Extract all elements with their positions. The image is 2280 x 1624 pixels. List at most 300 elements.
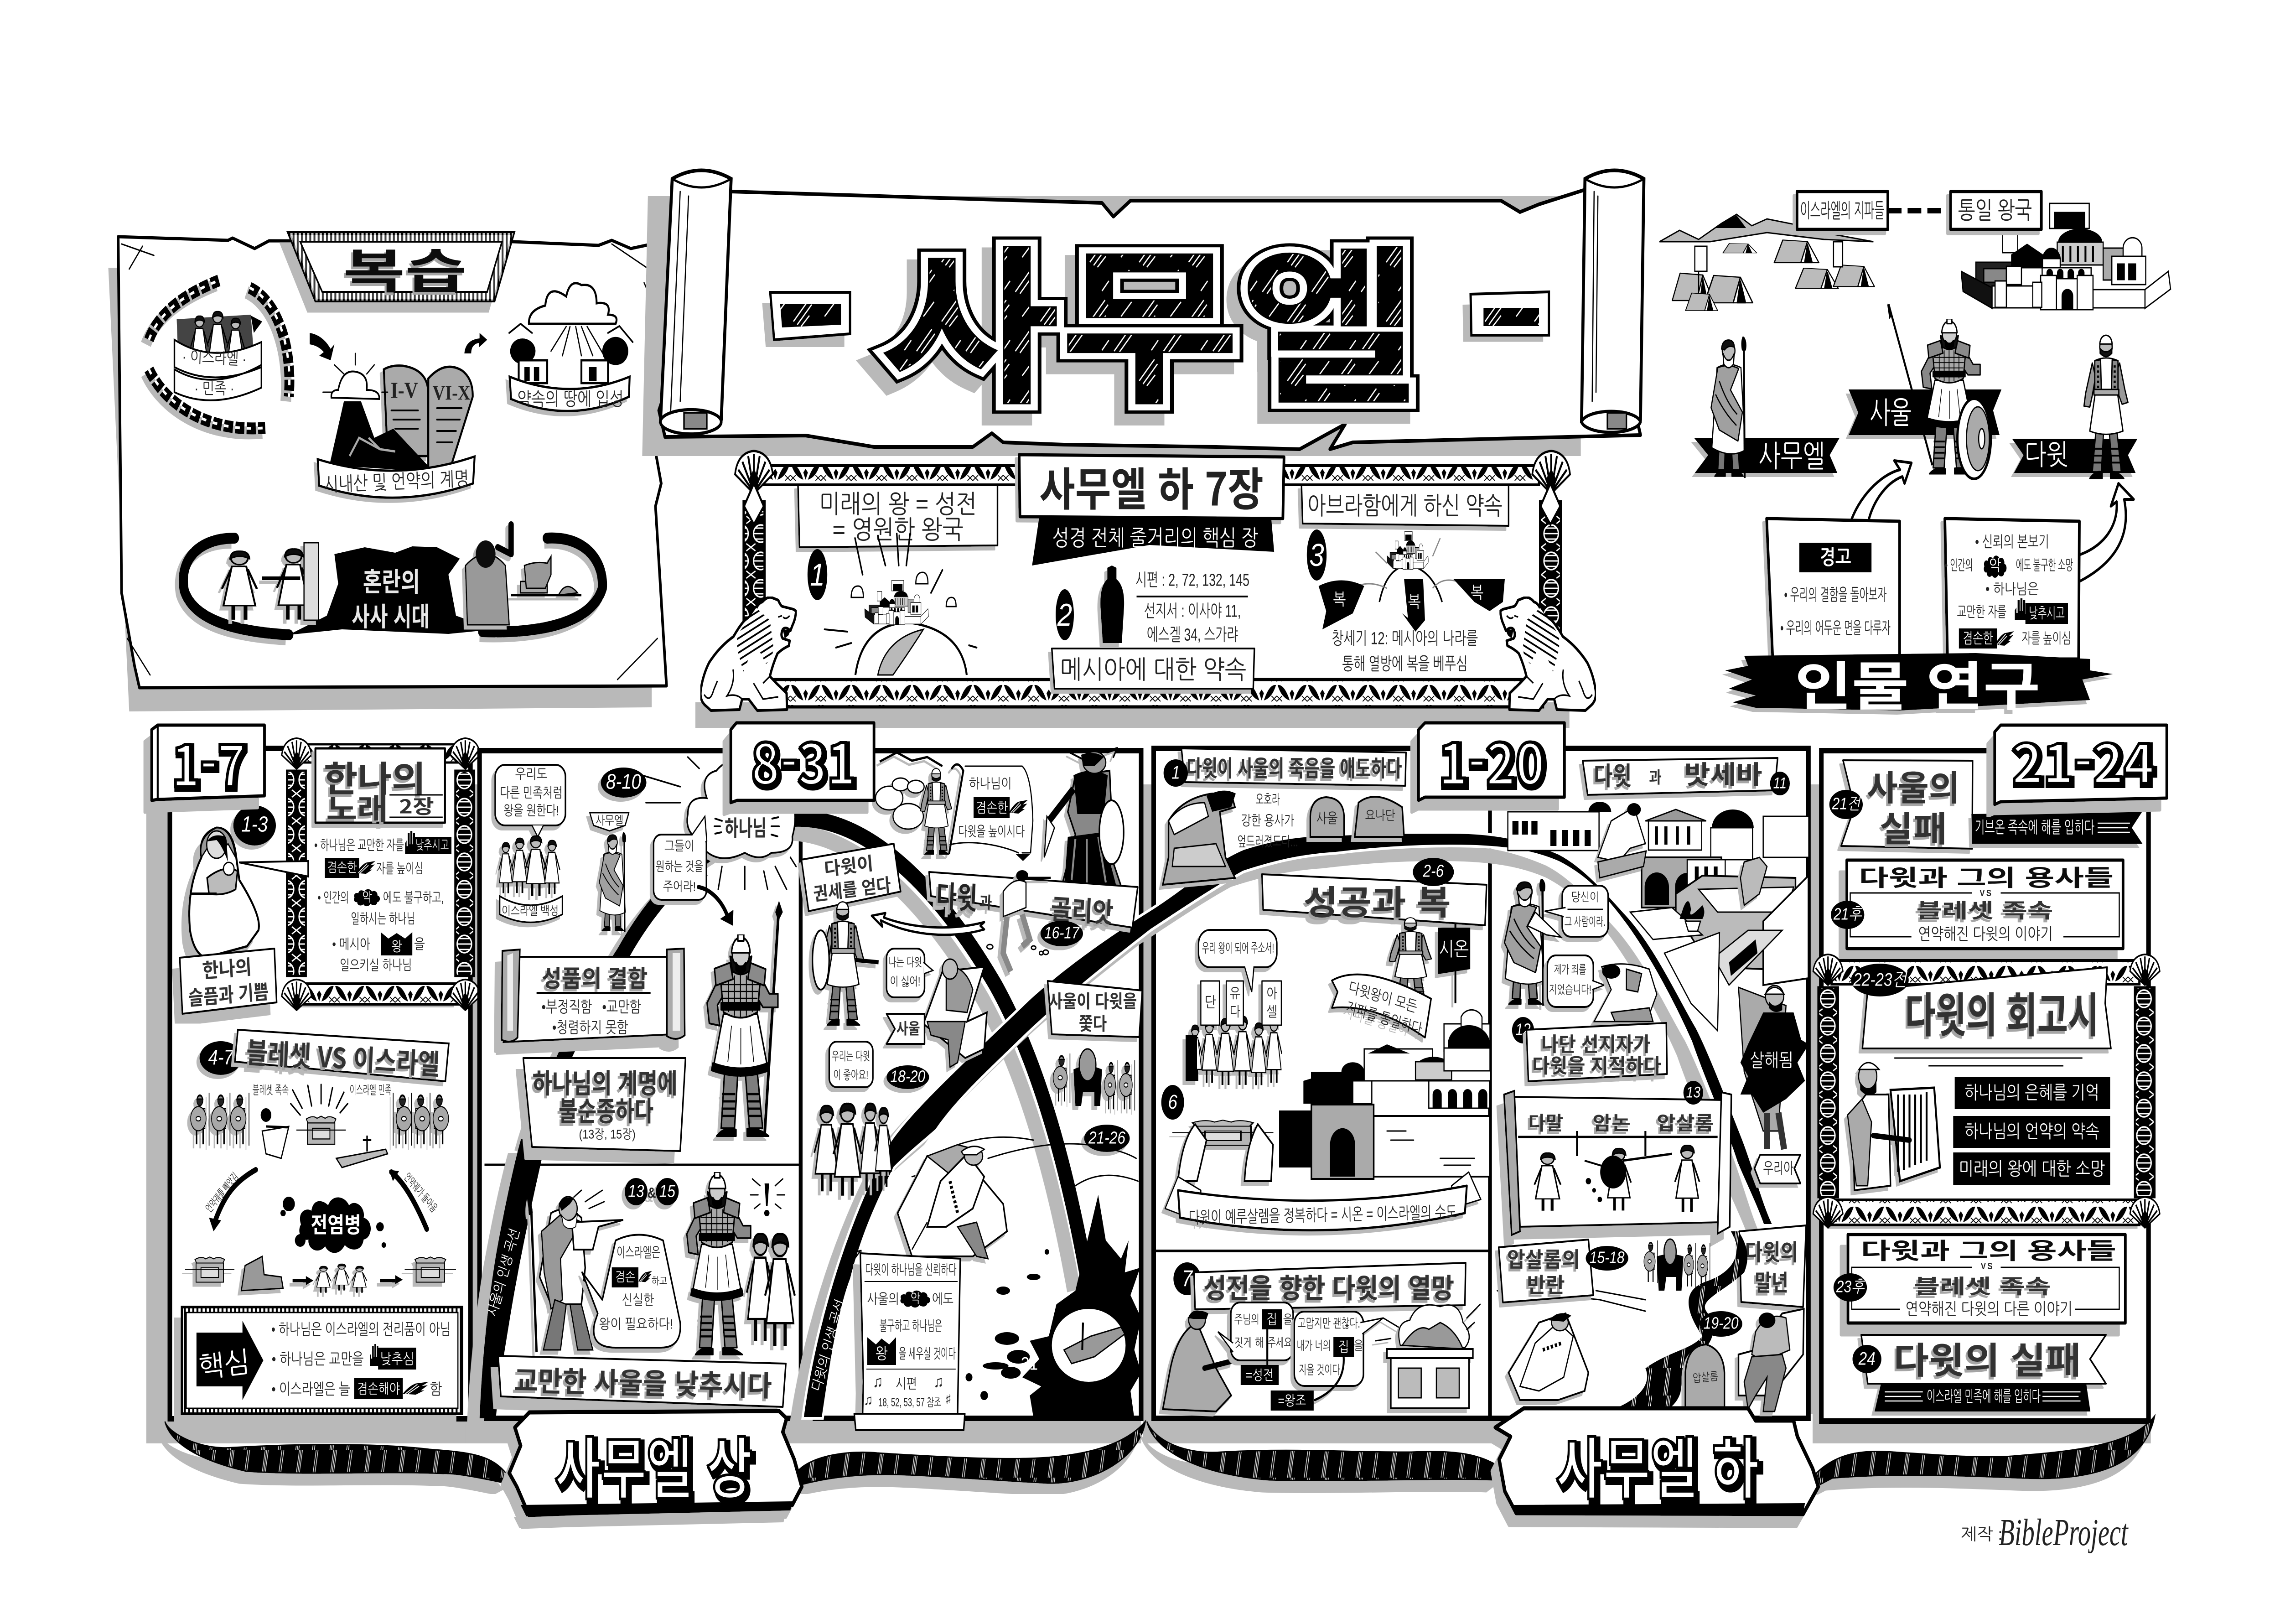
bubble: I hate David	[886, 949, 933, 997]
arrow ark returned: 언약궤가 돌아옴	[402, 1171, 439, 1215]
David hiding in rocks	[897, 1145, 1007, 1259]
key box: • 이스라엘은 늘	[271, 1380, 350, 1398]
left ornamental column	[735, 451, 773, 666]
black ribbon: harm to Israel	[1875, 1384, 2090, 1411]
bubble: we love David	[829, 1042, 873, 1087]
banner: Absalom's rebellion	[1499, 1240, 1593, 1302]
oval 21b: 21후	[1833, 905, 1863, 924]
box: messiah promise: 메시아에 대한 약속	[1060, 655, 1246, 684]
heading: David mourns: 다윗이 사울의 죽음을 애도하다	[1187, 751, 1402, 783]
banner David: 다윗	[2025, 439, 2068, 471]
banner: 1 Samuel label: 사무엘 상	[555, 1415, 752, 1513]
stones	[987, 944, 1048, 955]
banner: 2 Samuel label	[1495, 1408, 1819, 1516]
label: Uriah: 우리아	[1763, 1160, 1793, 1177]
bubble: we want a king	[495, 765, 565, 837]
bubble: give them what they want: 그들이	[664, 840, 694, 853]
banner: 2 Samuel label: 사무엘 하	[1559, 1418, 1762, 1516]
panel: final chapters frame	[1821, 751, 2149, 1421]
bubble: we want a king: 왕을 원한다!	[503, 803, 559, 818]
hills	[1497, 1291, 1645, 1311]
God cloud: 하나님	[725, 810, 767, 842]
number 3	[1307, 529, 1327, 581]
ark carried	[1172, 1120, 1273, 1181]
oval 19-20	[1700, 1311, 1742, 1337]
label on Saul arc: 사울의 인생 곡선	[485, 1226, 522, 1318]
banner: David's psalm title: 다윗의 회고시	[1905, 977, 2099, 1046]
scroll: Tamar Amnon Absalom: 암논	[1592, 1108, 1631, 1136]
bubble: need a humble king: 왕이 필요하다!	[599, 1316, 673, 1332]
heading: Philistines vs Israel: 블레셋 VS 이스라엘	[245, 1030, 441, 1083]
hill with city 1	[824, 534, 977, 675]
box: David and mighty men 1	[1847, 860, 2123, 949]
song notes: 낮추시고	[415, 839, 449, 852]
arrow to Saul	[699, 887, 733, 926]
number 2	[1056, 589, 1074, 640]
bubble: we love David: 이 좋아요!	[834, 1069, 868, 1082]
scroll: character flaws: •부정직함 •교만함	[542, 998, 641, 1016]
people of Israel: 이스라엘 백성	[502, 904, 559, 918]
box: future king: 미래의 왕 = 성전	[819, 489, 977, 519]
bubble: need a humble king: 신실한	[622, 1292, 654, 1308]
banner: David and Goliath: 골리앗	[1050, 887, 1114, 931]
study box: hope: • 신뢰의 본보기	[1975, 533, 2049, 550]
right dash ornament	[1471, 292, 1549, 335]
Genesis text	[1332, 629, 1478, 674]
Israel people with ribbon: · 민족 ·	[194, 380, 234, 397]
number 3: 3	[1309, 537, 1324, 573]
bubble: be our king	[1198, 930, 1277, 992]
key box: 함	[430, 1380, 442, 1398]
subheading black banner	[1032, 517, 1274, 566]
box: David and mighty men 2	[1848, 1233, 2125, 1323]
oval 2-6	[1413, 858, 1454, 886]
arc: David's life	[803, 832, 1774, 1418]
study box: hope: • 인간의	[1945, 558, 1973, 573]
tab 21-24	[1995, 721, 2167, 804]
tab 1-7: 1-7	[173, 723, 247, 805]
tab 8-31: 8-31	[751, 720, 855, 802]
panel contents: Saul rise, chapters 8-15	[485, 757, 796, 1407]
label: tribes	[1797, 192, 1888, 229]
right scroll roll	[1581, 171, 1644, 432]
song notes: 에도 불구하고,	[383, 890, 444, 905]
David shepherd and sheep	[876, 752, 963, 854]
bubble: you are the man: 그 사람이라.	[1565, 915, 1606, 929]
box: Saul chases David	[1048, 981, 1142, 1037]
left dash ornament	[770, 292, 850, 340]
Saul big	[707, 901, 783, 1136]
banner Saul	[1849, 389, 2001, 435]
label: Hannah sorrow and joy: 한나의	[202, 950, 252, 984]
box: David and mighty men 2: VS	[1981, 1261, 1994, 1271]
ribbon: David unites tribes: 다윗왕이 모든	[1347, 979, 1419, 1016]
study box: warning: • 우리의 어두운 면을 다루자	[1780, 619, 1891, 638]
united kingdom city	[1961, 203, 2171, 310]
Sinai mountain and tablets with ribbon: VI-X	[432, 381, 471, 405]
banner: David gains power: 권세를 얻다	[812, 870, 892, 906]
bubble: I will build your house: 내가 너의	[1296, 1339, 1331, 1353]
scroll: David trusts God: ♯	[946, 1392, 951, 1406]
judges ink ring with scenes: 사사 시대	[352, 596, 430, 634]
key box: 겸손해야	[357, 1381, 400, 1396]
chapter oval 8-10	[601, 768, 647, 798]
bubble: build God's house: 주세요	[1268, 1336, 1292, 1350]
warning tag: 경고	[1820, 546, 1851, 569]
ribbon: David unites tribes	[1332, 975, 1431, 1038]
arrow to Sinai	[310, 333, 334, 360]
tab 8-31	[731, 720, 874, 804]
heading: success and blessing: 성공과 복	[1303, 875, 1451, 924]
bubble: build God's house: 집	[1266, 1312, 1277, 1327]
box: David's final years	[1739, 1225, 1806, 1307]
Hannah figure	[189, 828, 259, 958]
box: future king	[798, 485, 998, 547]
song notes: 악	[362, 891, 372, 904]
banner: Nathan confronts David	[1527, 1023, 1667, 1081]
Sinai mountain and tablets with ribbon: 시내산 및 언약의 계명	[323, 468, 469, 496]
heading: David and Bathsheba: 다윗	[1594, 755, 1632, 793]
study box: hope: 악	[1989, 557, 2001, 574]
oval 21a	[1829, 790, 1863, 819]
label: Hannah sorrow and joy	[180, 949, 277, 1014]
box: disobeys commands	[523, 1058, 685, 1151]
box: David and mighty men 1: 연약해진 다윗의 이야기	[1918, 925, 2053, 944]
bubble: build God's house: 짓게 해	[1234, 1336, 1264, 1350]
banner: 1 Samuel label: 사무엘 상	[558, 1418, 755, 1516]
study box: hope: • 하나님은	[1985, 581, 2039, 597]
scroll: Tamar Amnon Absalom	[1504, 1091, 1731, 1235]
bubble: I have sinned	[1547, 955, 1604, 1007]
tribes crowd with banners: 다	[1230, 1004, 1240, 1019]
labels: armies	[253, 1084, 391, 1097]
banner: 2 Samuel ribbons	[1147, 1416, 2155, 1484]
figure David	[2084, 335, 2128, 478]
David with harp	[1848, 1063, 1940, 1190]
bubble: I will build your house	[1294, 1312, 1383, 1400]
Uriah killed	[1738, 986, 1809, 1149]
ribbon: David unites tribes: 지파를 통일하다	[1345, 999, 1424, 1038]
scroll: Tamar Amnon Absalom: 압살롬	[1657, 1108, 1714, 1136]
speech tail	[239, 861, 308, 877]
bubble: give them what they want: 원하는 것을	[656, 860, 703, 874]
bubble: I hate David: 나는 다윗	[888, 956, 922, 970]
circle 7	[1173, 1262, 1201, 1295]
banner: Saul's failure: 실패	[1880, 802, 1947, 852]
circle 7: 7	[1182, 1266, 1193, 1291]
banner: Saul's failure: 사울의	[1867, 761, 1960, 811]
circle 12: 12	[1515, 1021, 1531, 1039]
exclamation	[751, 1179, 785, 1216]
black bars: 하나님의 언약의 약속	[1964, 1121, 2099, 1141]
Jerusalem city	[1279, 1010, 1490, 1179]
scripture references: 에스겔 34, 스가랴	[1147, 625, 1238, 644]
Samuel with label: 사무엘	[596, 814, 623, 828]
bubble: build God's house: 주님의	[1234, 1313, 1259, 1327]
gravestones: 요나단	[1365, 809, 1395, 823]
heading: David and Bathsheba	[1583, 754, 1777, 795]
frame: David's retrospective psalm	[1813, 955, 2160, 1228]
song notes: • 메시아	[332, 936, 370, 952]
song notes	[314, 831, 451, 973]
bubble: I hate David: 이 싫어!	[890, 975, 920, 989]
tab 1-7	[151, 721, 264, 805]
scroll: David trusts God: 불구하고 하나님은	[880, 1318, 942, 1333]
lament text: 오호라	[1255, 792, 1280, 807]
Nathan	[1504, 879, 1561, 1006]
David on balcony	[1598, 803, 1646, 878]
splat with fallen Saul	[966, 1195, 1141, 1418]
ribbon: Jerusalem conquered: 다윗이 예루살렘을 정복하다 = 시온 = 이스라엘의 수도	[1188, 1204, 1457, 1227]
character study brush title: 인물 연구	[1795, 644, 2040, 721]
bubble: I will build your house: 집	[1338, 1339, 1349, 1354]
heading: David and Bathsheba: 과	[1649, 764, 1662, 788]
number 2: 2	[1057, 597, 1072, 633]
scroll: David trusts God: 왕	[876, 1345, 888, 1362]
bubble: I have sinned: 제가 죄를	[1554, 963, 1586, 976]
song notes: 일으키실 하나님	[340, 957, 412, 973]
Saul humbled	[687, 1172, 751, 1354]
tab 21-24: 21-24	[2012, 721, 2155, 799]
label: Hannah sorrow and joy: 슬픔과 기쁨	[187, 975, 269, 1011]
motion lines	[574, 1190, 604, 1209]
Absalom's grave	[1685, 1344, 1725, 1409]
bubble: need a humble king: 이스라엘은	[617, 1245, 660, 1260]
banner: David and Goliath: 다윗	[935, 872, 978, 918]
banner Saul: 사울	[1870, 396, 1912, 430]
circle 6	[1161, 1085, 1184, 1120]
title: Samuel: 사무엘	[880, 192, 1420, 437]
banner David	[2012, 439, 2138, 473]
right top: tribes to kingdom	[1659, 192, 2171, 721]
right lion	[1500, 597, 1596, 711]
chapter circles 13 and 15	[625, 1178, 679, 1205]
Goliath	[1044, 748, 1124, 892]
song notes: 일하시는 하나님	[351, 911, 415, 926]
black bars: 미래의 왕에 대한 소망	[1959, 1159, 2105, 1179]
city and blessing arrows	[1319, 532, 1505, 632]
banner: David and Goliath: 과	[979, 889, 993, 913]
bubble: you are the man	[1545, 886, 1608, 937]
arrow to Saul	[1850, 461, 1912, 524]
Genesis text: 통해 열방에 복을 베푸심	[1342, 654, 1467, 674]
city and blessing arrows: 복	[1408, 593, 1421, 611]
David mourning	[1163, 791, 1236, 885]
tribes crowd with banners	[1186, 981, 1282, 1085]
panel: review parchment	[109, 233, 667, 711]
heading: song of Hannah: 2장	[399, 792, 434, 819]
tab 1-7: 1-7	[171, 721, 246, 804]
black bars	[1953, 1077, 2110, 1185]
scroll: David trusts God	[854, 1253, 965, 1430]
banner: David and Goliath	[929, 872, 1138, 931]
black ribbon: harm to Gibeonites: 기브온 족속에 해를 입히다	[1974, 819, 2094, 837]
label: united kingdom: 통일 왕국	[1958, 197, 2032, 224]
scripture references	[1135, 571, 1249, 644]
banner Samuel: 사무엘	[1758, 439, 1825, 473]
banner: David gains power: 다윗이	[823, 848, 874, 881]
left lion	[700, 597, 796, 711]
scroll: David trusts God: 을 세우실 것이다	[899, 1346, 956, 1361]
tribes camp	[1659, 214, 1875, 311]
panel: 1 Samuel 8-31 frame	[480, 751, 1141, 1418]
tag: dynasty: =왕조	[1278, 1393, 1306, 1408]
David fleeing	[1508, 1313, 1588, 1400]
box: David and mighty men 1: VS	[1979, 888, 1993, 898]
box: future king: = 영원한 왕국	[832, 515, 964, 544]
lament text: 강한 용사가	[1241, 813, 1294, 828]
banner: David's failure	[1861, 1332, 2106, 1385]
heading: song of Hannah: 노래	[326, 786, 388, 828]
labels: armies: 이스라엘 민족	[350, 1084, 391, 1097]
oval 18-20: 18-20	[890, 1068, 926, 1086]
key arrow: 핵심	[197, 1346, 251, 1384]
black bars: 하나님의 은혜를 기억	[1964, 1083, 2099, 1103]
tribes crowd with banners: 아	[1266, 986, 1277, 1001]
right ornamental column	[1532, 451, 1570, 666]
banner: David gains power	[802, 844, 901, 911]
label: united kingdom	[1951, 192, 2042, 229]
oval 24: 24	[1858, 1349, 1876, 1369]
black ribbon: harm to Gibeonites	[1971, 811, 2142, 844]
heading: David's desire for temple: 성전을 향한 다윗의 열망	[1203, 1266, 1454, 1306]
promised land: 약속의 땅에 입성	[517, 389, 624, 409]
tab 1-20	[1419, 720, 1565, 804]
bubble: be our king: 우리 왕이 되어 주소서!	[1202, 942, 1274, 955]
scroll: David trusts God: ♫	[864, 1392, 873, 1408]
panel contents: 2 Samuel 11-20	[1497, 754, 1809, 1411]
tab 8-31: 8-31	[752, 721, 857, 804]
bubble: need a humble king: 겸손	[615, 1271, 635, 1284]
chain around Israel	[146, 280, 290, 433]
oval 19-20: 19-20	[1704, 1314, 1739, 1333]
box: David's final years: 다윗의	[1745, 1235, 1798, 1267]
big panel drop shadows	[146, 702, 2151, 1443]
tribes crowd with banners: 셀	[1266, 1004, 1277, 1019]
number 1	[808, 549, 827, 600]
bubble: build God's house	[1218, 1302, 1293, 1365]
panel: 2 Samuel 7	[700, 451, 1596, 711]
plaque: review heading	[289, 233, 513, 302]
banner: Nathan confronts David: 다윗을 지적하다	[1532, 1049, 1661, 1079]
arrow ark returned	[389, 1170, 439, 1229]
palace rooftops	[1508, 802, 1809, 1031]
arrow up along Saul arc	[517, 1178, 529, 1204]
judges ink ring with scenes	[180, 524, 602, 639]
Sinai mountain and tablets with ribbon	[318, 353, 475, 498]
subheading black banner: 성경 전체 줄거리의 핵심 장	[1052, 526, 1258, 550]
chapter oval 8-10: 8-10	[606, 770, 641, 794]
banner Samuel	[1694, 438, 1840, 473]
scroll: David trusts God: ♫	[933, 1373, 944, 1391]
key box: 낮추심	[380, 1351, 414, 1367]
box: messiah promise	[1052, 649, 1254, 689]
David old on throne	[1738, 1309, 1804, 1411]
key box: • 하나님은 교만을	[272, 1350, 364, 1368]
gravestones	[1310, 797, 1404, 837]
scroll: David trusts God: 사울의	[867, 1291, 899, 1307]
scroll: David trusts God: 다윗이 하나님을 신뢰하다	[865, 1262, 957, 1277]
bubble: we want a king: 우리도	[515, 766, 547, 782]
tab 1-20: 1-20	[1440, 721, 1546, 804]
chapter circles 13 and 15: 13	[628, 1182, 644, 1201]
oval 22-23: 22-23전	[1853, 970, 1908, 990]
Absalom's army	[1644, 1239, 1710, 1291]
text: God lifts humble David: 다윗을 높이시다	[958, 824, 1025, 839]
black ribbon: harm to Israel: 이스라엘 민족에 해를 입히다	[1927, 1388, 2041, 1405]
song notes: 을	[414, 936, 425, 952]
label: tribes: 이스라엘의 지파들	[1800, 199, 1885, 222]
title: Samuel	[870, 192, 1420, 449]
banner: 2 Samuel label: 사무엘 하	[1556, 1415, 1759, 1513]
study box: hope: 자를 높이심	[2021, 630, 2071, 647]
figure Saul with spear and shield	[1887, 303, 1991, 479]
gravestones: 사울	[1316, 810, 1338, 826]
circle 13	[1684, 1081, 1703, 1105]
scripture references: 시편 : 2, 72, 132, 145	[1135, 571, 1249, 590]
crowd	[814, 1104, 892, 1196]
song notes: • 인간의	[318, 890, 349, 905]
box: disobeys commands: 하나님의 계명에	[533, 1062, 678, 1101]
key arrow	[197, 1321, 264, 1400]
bubble: I will build your house: 고맙지만 괜찮다.	[1297, 1317, 1360, 1331]
text: God lifts humble David	[950, 766, 1033, 861]
bubble: need a humble king: 하고	[652, 1276, 667, 1287]
scroll: David trusts God: ♫	[873, 1373, 883, 1391]
city and blessing arrows: 복	[1333, 591, 1346, 609]
oval 21-26: 21-26	[1088, 1128, 1125, 1147]
left soldiers	[191, 1093, 249, 1146]
heading: success and blessing	[1262, 874, 1487, 925]
chapter circles 13 and 15: 15	[659, 1182, 675, 1201]
figure Samuel	[1711, 337, 1746, 478]
bubble: we love David: 우리는 다윗	[832, 1050, 870, 1064]
text: God lifts humble David: 겸손한	[976, 800, 1008, 815]
banner: 1 Samuel ribbons	[165, 1422, 1145, 1484]
promised land	[509, 283, 633, 411]
circle 1: 1	[1171, 763, 1180, 783]
David on Zion with flag: 시온	[1439, 939, 1469, 960]
heading box: 사무엘 하 7장	[1039, 452, 1264, 519]
bottom ornamental strip	[760, 680, 1543, 707]
credit: BibleProject	[1999, 1511, 2129, 1554]
tab 1-20: 1-20	[1438, 720, 1545, 802]
study box: hope: 에도 불구한 소망	[2016, 558, 2073, 573]
David kneeling	[1163, 1311, 1231, 1411]
arrow to promised land	[464, 333, 487, 353]
oval 23b	[1834, 1273, 1867, 1302]
study box: hope: 겸손한	[1963, 630, 1993, 647]
song notes: 자를 높이심	[376, 861, 423, 876]
heading: song of Hannah: 한나의	[324, 751, 425, 802]
labels: armies: 블레셋 족속	[253, 1084, 289, 1097]
God cloud	[687, 762, 795, 858]
top ornamental strip	[764, 466, 1539, 485]
box: Saul chases David: 사울이 다윗을	[1049, 986, 1137, 1013]
Uriah killed: 살해됨	[1750, 1050, 1793, 1070]
circle 6: 6	[1168, 1090, 1177, 1113]
frightened people	[747, 1234, 795, 1346]
tag: temple	[1241, 1365, 1279, 1385]
box: David's final years: 말년	[1755, 1265, 1788, 1298]
oval 22-23	[1851, 964, 1909, 996]
panel contents: David rise, chapters 16-31	[802, 748, 1142, 1430]
winding road	[1619, 1231, 1747, 1409]
box: Saul chases David: 쫓다	[1079, 1009, 1107, 1035]
bubble: I will build your house: 지을 것이다.	[1299, 1364, 1342, 1377]
oval 16-17: 16-17	[1044, 924, 1080, 942]
judges ink ring with scenes: 혼란의	[363, 561, 420, 599]
